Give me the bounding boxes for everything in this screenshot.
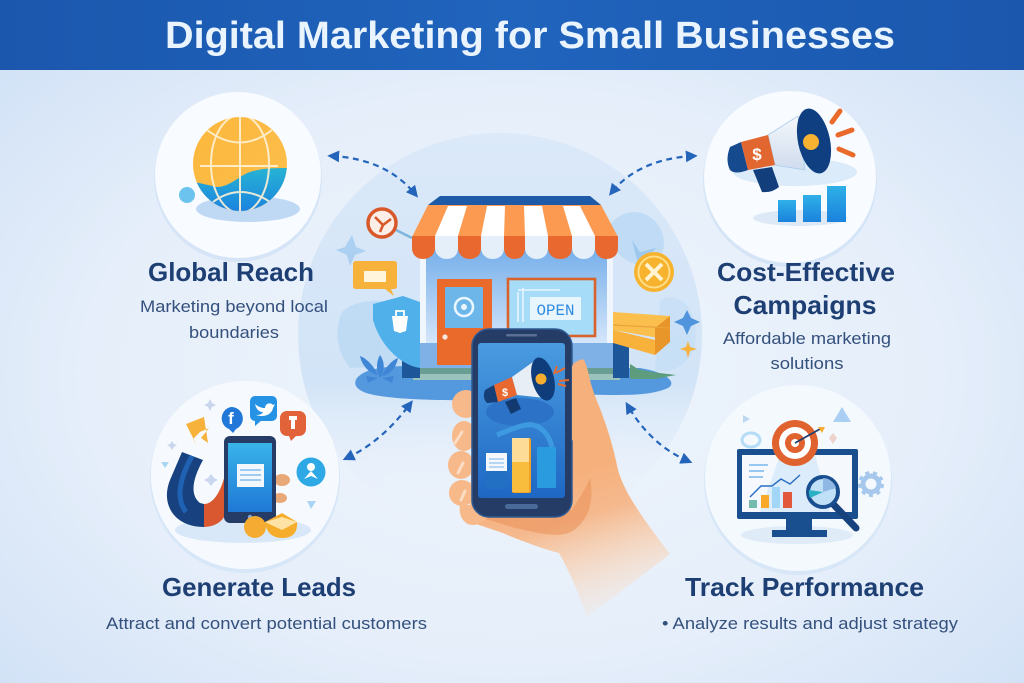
- icon: shield with bag: [373, 296, 420, 368]
- description: Marketing beyond local: [140, 298, 328, 316]
- icon: stars: [674, 310, 700, 358]
- heading: Cost-Effective: [717, 257, 895, 287]
- chart: [749, 465, 800, 508]
- title: Digital Marketing for Small Businesses: [165, 15, 895, 57]
- window with open sign: [508, 279, 595, 336]
- heading: Global Reach: [148, 257, 314, 287]
- icon: cursor arrow: [186, 417, 209, 446]
- window with open sign: OPEN: [536, 302, 574, 320]
- lead phone: [224, 436, 276, 523]
- heading: Track Performance: [685, 572, 924, 602]
- magnet: [167, 452, 226, 527]
- description: boundaries: [189, 324, 279, 342]
- door: [437, 279, 492, 365]
- heading: Generate Leads: [162, 572, 356, 602]
- circle: [150, 381, 340, 573]
- description: [140, 298, 328, 342]
- finger nails: [455, 432, 465, 500]
- thumb: [572, 359, 595, 445]
- icon: plant left: [360, 355, 398, 383]
- icon: gift coin: [244, 513, 297, 538]
- icon: gear: [860, 472, 882, 496]
- description: Affordable marketing: [723, 330, 891, 348]
- header banner: [0, 0, 1024, 70]
- icon: megaphone and bars: $: [752, 145, 762, 164]
- hand: [470, 340, 670, 617]
- icon: target: [772, 420, 825, 466]
- icon: plant right: [630, 364, 676, 379]
- panel: track performance: [662, 385, 959, 633]
- phone megaphone: $: [502, 387, 508, 399]
- panel: global reach: [140, 92, 328, 342]
- decorative sparkles: [161, 399, 316, 509]
- description: [723, 330, 891, 373]
- icon: globe: [179, 115, 300, 222]
- panel: cost-effective campaigns: [703, 91, 895, 373]
- description: Attract and convert potential customers: [106, 615, 427, 633]
- monitor: [737, 449, 858, 537]
- circle: [704, 385, 892, 575]
- phone charts: [486, 425, 556, 493]
- heading: [717, 257, 895, 320]
- phone: [472, 329, 572, 517]
- icon: user circle: [296, 458, 326, 486]
- description: solutions: [770, 355, 844, 373]
- icon: alert bubble: [280, 411, 306, 441]
- phone megaphone: [484, 355, 569, 426]
- decorative shapes: [742, 407, 851, 447]
- steps: [413, 368, 620, 380]
- icon: magnifier: [808, 477, 856, 528]
- panel: store illustration: [336, 196, 700, 400]
- icon: clock: [368, 209, 412, 238]
- circle: [703, 91, 877, 267]
- icon: parcel box: [613, 312, 670, 355]
- store base: [420, 343, 613, 371]
- central backdrop circle: [298, 133, 702, 537]
- icon: coin: [634, 252, 674, 292]
- description: • Analyze results and adjust strategy: [662, 615, 959, 633]
- icon: facebook bubble: [222, 407, 243, 433]
- icon: facebook bubble: f: [228, 409, 234, 428]
- hand shadow: [476, 478, 591, 535]
- icon: megaphone and bars: [728, 105, 857, 226]
- blue ground: [355, 366, 671, 400]
- panel: generate leads: [106, 381, 427, 633]
- icon: mail bubble: [353, 261, 397, 296]
- dashed arrows between features and store: [332, 156, 693, 461]
- icon: magnet, phone and social bubbles: [161, 396, 326, 543]
- background blobs: [336, 212, 696, 371]
- store wall: [420, 237, 613, 343]
- fingers: [273, 474, 290, 503]
- icon: twitter bubble: [250, 396, 277, 426]
- panel: hand holding phone: [448, 329, 670, 617]
- heading: Campaigns: [734, 290, 876, 320]
- circle: [154, 92, 322, 262]
- awning: [412, 196, 618, 259]
- icon: monitor with analytics: [737, 407, 882, 544]
- fingers: [448, 390, 488, 525]
- pillars: [402, 338, 629, 378]
